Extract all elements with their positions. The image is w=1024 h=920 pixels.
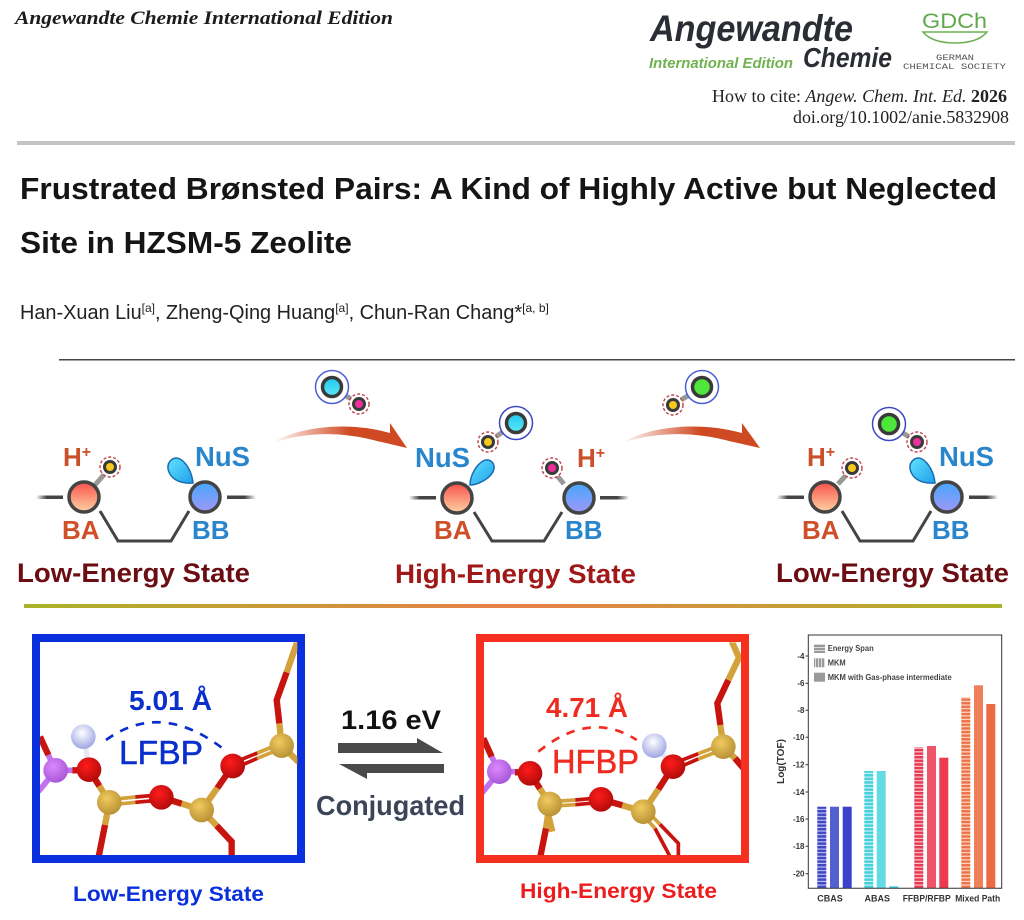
x axis labels: Mixed Path: [955, 894, 1000, 904]
y axis tick labels: -16: [793, 815, 805, 824]
panel: HFBP high-energy structure: HFBP: [552, 743, 639, 780]
scheme: high-energy state: BB: [565, 515, 603, 545]
scheme: high-energy state: BA: [434, 515, 472, 545]
scheme: second low-energy state: [776, 408, 1009, 588]
scheme: second low-energy state: Low-Energy State: [776, 558, 1009, 588]
article title: [20, 171, 997, 260]
scheme: first low-energy state: BA: [62, 515, 100, 545]
scheme: second low-energy state: NuS: [939, 441, 994, 472]
x axis labels: ABAS: [865, 894, 890, 904]
journal logo: [649, 8, 892, 73]
scheme: second low-energy state: H: [807, 442, 826, 472]
citation: doi.org/10.1002/anie.5832908: [793, 107, 1009, 127]
panel: LFBP low-energy structure: 5.01 Å: [129, 685, 212, 716]
scheme: high-energy state: NuS: [415, 442, 470, 473]
conjugated label: Conjugated: [316, 790, 465, 821]
bar chart: Log(TOF) by site type: [776, 635, 1002, 904]
equilibrium arrows: [338, 738, 444, 779]
caption: low-energy state: Low-Energy State: [73, 882, 264, 906]
journal running title: Angewandte Chemie International Edition: [14, 8, 393, 29]
journal logo: Angewandte: [649, 8, 853, 49]
scheme: second low-energy state: +: [826, 444, 835, 461]
scheme: first low-energy state: [17, 441, 256, 588]
y axis tick labels: -20: [793, 870, 805, 878]
y axis tick labels: -6: [797, 679, 805, 688]
scheme: second low-energy state: BA: [802, 515, 840, 545]
y axis tick labels: -14: [793, 788, 805, 797]
GDCh society logo: CHEMICAL SOCIETY: [903, 62, 1006, 72]
GDCh society logo: GDCh: [922, 10, 987, 33]
GDCh society logo: [903, 10, 1006, 72]
reactant molecule: cyan and pink: [316, 370, 369, 414]
journal logo: International Edition: [649, 55, 793, 72]
scheme: second low-energy state: BB: [932, 515, 970, 545]
scheme: first low-energy state: +: [82, 444, 91, 461]
citation: How to cite: Angew. Chem. Int. Ed. 2026: [712, 86, 1007, 106]
y axis tick labels: -10: [793, 733, 805, 742]
y axis tick labels: -4: [797, 652, 805, 661]
citation: [712, 86, 1009, 127]
scheme: high-energy state: [395, 406, 636, 589]
article title: Frustrated Brønsted Pairs: A Kind of Highly Active but Neglected: [20, 171, 997, 206]
bars: CBAS: [817, 807, 852, 888]
authors: [a]: [142, 301, 155, 315]
y axis tick labels: -12: [793, 760, 805, 770]
chart axes frame: [806, 635, 1002, 888]
article title: Site in HZSM-5 Zeolite: [20, 225, 352, 260]
panel: LFBP low-energy structure: [36, 638, 301, 859]
bars: Mixed Path: [961, 685, 995, 888]
journal logo: Chemie: [803, 42, 892, 73]
bars: ABAS: [864, 771, 898, 888]
y axis tick labels: [793, 652, 805, 878]
arrow: second reaction step: [622, 423, 760, 448]
y axis title: Log(TOF): [776, 739, 787, 784]
panel: HFBP high-energy structure: 4.71 Å: [546, 692, 628, 723]
scheme: first low-energy state: BB: [192, 515, 230, 545]
chart legend: [814, 644, 952, 682]
authors: [a, b]: [522, 301, 549, 315]
y axis tick labels: -8: [797, 706, 805, 715]
y axis tick labels: -18: [793, 842, 805, 851]
authors: Han-Xuan Liu: [20, 302, 142, 324]
chart legend: MKM with Gas-phase intermediate: [828, 673, 952, 682]
authors: , Chun-Ran Chang*: [349, 302, 522, 324]
bars: FFBP/RFBP: [914, 746, 948, 888]
scheme: high-energy state: +: [596, 445, 605, 462]
caption: high-energy state: High-Energy State: [520, 879, 717, 903]
chart legend: MKM: [828, 658, 846, 668]
energy label: 1.16 eV: [341, 705, 441, 735]
chart legend: Energy Span: [828, 644, 874, 653]
x axis labels: [817, 894, 1000, 904]
scheme: high-energy state: High-Energy State: [395, 559, 636, 589]
scheme: high-energy state: H: [577, 443, 596, 473]
x axis labels: CBAS: [817, 894, 843, 904]
scheme: first low-energy state: NuS: [195, 441, 250, 472]
arrow: first reaction step: [272, 423, 407, 448]
product molecule: green and yellow: [663, 370, 718, 415]
panel: HFBP high-energy structure: [480, 638, 745, 859]
scheme: first low-energy state: H: [63, 442, 82, 472]
authors: , Zheng-Qing Huang: [155, 302, 335, 324]
x axis labels: FFBP/RFBP: [903, 894, 951, 904]
authors: [a]: [335, 301, 349, 315]
panel: LFBP low-energy structure: LFBP: [119, 734, 203, 771]
GDCh society logo: GERMAN: [936, 53, 974, 63]
scheme: first low-energy state: Low-Energy State: [17, 558, 250, 588]
